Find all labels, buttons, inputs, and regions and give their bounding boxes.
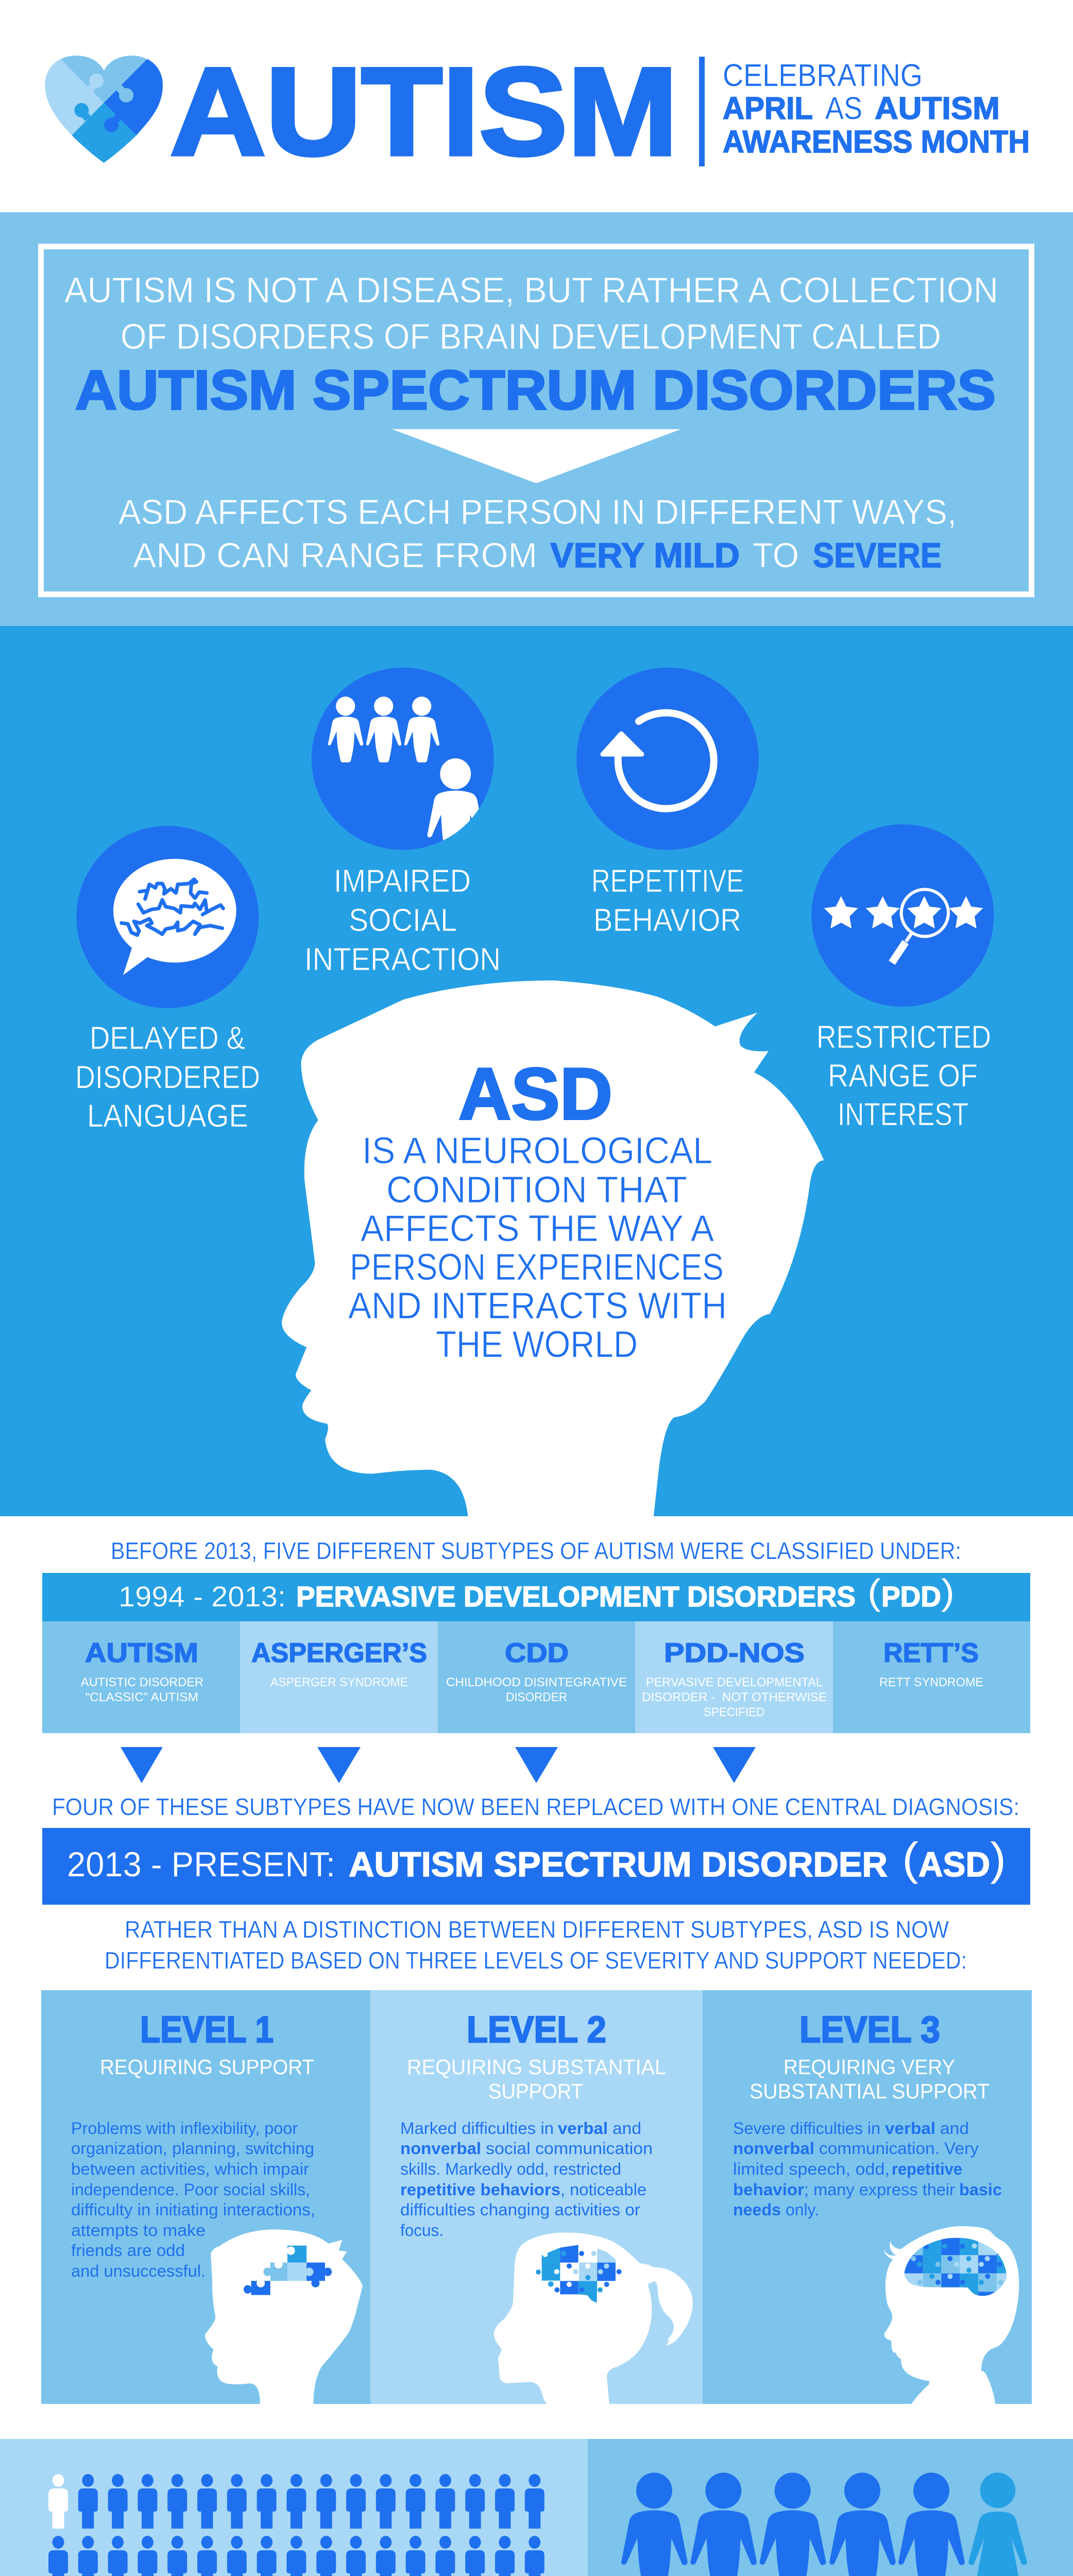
text: neurological condition: AFFECTS THE WAY A <box>361 1208 714 1249</box>
cell: PDD-NOS: DISORDER - NOT OTHERWISE <box>642 1690 827 1704</box>
cell: asperger's: ASPERGER SYNDROME <box>270 1675 408 1689</box>
text: level 1 description: difficulty in initiating interactions, <box>71 2200 315 2219</box>
heading: level 1: LEVEL 1 <box>140 2009 274 2050</box>
subheading: requiring substantial support: SUPPORT <box>488 2079 583 2103</box>
text: rather than a distinction: RATHER THAN A DISTINCTION BETWEEN DIFFERENT SUBTYPES, ASD IS NOW <box>125 1916 949 1943</box>
banner: ASD: 2013 - PRESENT: <box>67 1845 335 1884</box>
cell: rett's: RETT SYNDROME <box>879 1675 983 1689</box>
text: rather than a distinction: DIFFERENTIATED BASED ON THREE LEVELS OF SEVERITY AND SUPPORT NEEDED: <box>105 1947 967 1974</box>
head silhouette with full puzzle brain <box>884 2226 1019 2404</box>
text: level 1 description: and unsuccessful. <box>71 2262 206 2280</box>
white frame <box>41 246 1031 595</box>
banner: ASD <box>42 1828 1030 1905</box>
cell: autism: “CLASSIC” AUTISM <box>86 1690 198 1704</box>
cell: autism: AUTISM <box>85 1638 198 1668</box>
label: delayed and disordered language <box>75 1021 260 1134</box>
subtitle: celebrating april <box>723 58 1030 159</box>
cell: PDD-NOS: PDD-NOS <box>664 1638 805 1668</box>
text: level 3 description: repetitive <box>892 2160 962 2178</box>
banner: ASD: ASD <box>918 1845 990 1884</box>
text: level 2 description: social communication <box>486 2139 653 2158</box>
text: neurological condition: CONDITION THAT <box>386 1170 687 1211</box>
head silhouette <box>282 980 824 1517</box>
banner: PDD: PERVASIVE DEVELOPMENT DISORDERS <box>296 1580 856 1613</box>
label: repetitive behavior: REPETITIVE <box>591 863 744 899</box>
cell: PDD-NOS: SPECIFIED <box>704 1705 764 1719</box>
text: level 3 description: and <box>940 2119 969 2138</box>
heading: level 2: LEVEL 2 <box>467 2009 606 2050</box>
text: level 3 description: communication. Very <box>819 2139 979 2158</box>
text: level 3 description <box>733 2119 1002 2219</box>
label: delayed and disordered language: LANGUAGE <box>87 1098 248 1134</box>
text: level 3 description: limited speech, odd, <box>733 2160 890 2178</box>
label: delayed and disordered language: DELAYED & <box>90 1021 245 1056</box>
text: neurological condition: AND INTERACTS WITH <box>348 1285 727 1327</box>
heading: level 3: LEVEL 3 <box>799 2009 940 2050</box>
text: level 3 description: needs <box>733 2200 781 2219</box>
banner: PDD: 1994 - 2013: <box>118 1580 286 1613</box>
cell: rett's <box>833 1621 1030 1733</box>
text: asd affects each person: SEVERE <box>813 536 942 575</box>
text: level 3 description: basic <box>959 2180 1002 2199</box>
text: before 2013: BEFORE 2013, FIVE DIFFERENT SUBTYPES OF AUTISM WERE CLASSIFIED UNDER: <box>111 1537 961 1564</box>
label: impaired social interaction: IMPAIRED <box>334 863 471 899</box>
text: level 2 description: Marked difficulties in <box>400 2119 554 2138</box>
cell: CDD: CHILDHOOD DISINTEGRATIVE <box>446 1675 627 1689</box>
text: autism is not a disease: OF DISORDERS OF BRAIN DEVELOPMENT CALLED <box>121 316 941 357</box>
label: restricted range of interest: RESTRICTED <box>816 1020 991 1055</box>
text: level 3 description: only. <box>786 2200 819 2219</box>
banner: PDD: ) <box>941 1572 955 1612</box>
title: AUTISM: AUTISM <box>170 42 678 181</box>
text: four of these subtypes: FOUR OF THESE SUBTYPES HAVE NOW BEEN REPLACED WITH ONE CENTRAL DIAGNOSIS: <box>52 1793 1019 1820</box>
text: level 1 description: attempts to make <box>71 2221 206 2240</box>
cell: rett's: RETT’S <box>883 1638 979 1668</box>
text: level 1 description: organization, planning, switching <box>71 2139 314 2158</box>
text: asd affects each person: VERY MILD <box>550 536 740 575</box>
text: level 1 description <box>71 2119 315 2280</box>
banner: PDD: ( <box>867 1572 881 1612</box>
text: level 2 description: verbal <box>558 2119 608 2138</box>
arrow: down triangle <box>392 429 681 483</box>
subheading: requiring very substantial support: REQUIRING VERY <box>784 2055 955 2079</box>
text: neurological condition: THE WORLD <box>436 1324 638 1365</box>
panel: boys and girls statistic <box>588 2439 1073 2576</box>
subtitle: celebrating april: CELEBRATING <box>723 58 923 93</box>
panel: level 3 <box>703 1990 1032 2404</box>
text: level 2 description: difficulties changing activities or <box>400 2200 640 2219</box>
cell: autism <box>42 1621 240 1733</box>
text: level 1 description: Problems with inflexibility, poor <box>71 2119 298 2138</box>
text: autism is not a disease <box>64 270 998 357</box>
panel: definition <box>0 212 1073 626</box>
text: neurological condition: PERSON EXPERIENCES <box>350 1247 724 1288</box>
panel: level 2 <box>370 1990 703 2404</box>
banner: ASD: ( <box>902 1833 918 1884</box>
subheading: requiring very substantial support <box>750 2055 990 2103</box>
text: level 2 description: skills. Markedly odd, restricted <box>400 2160 621 2178</box>
text: level 3 description: Severe difficulties in <box>733 2119 880 2138</box>
cell: asperger's: ASPERGER’S <box>251 1638 427 1668</box>
head silhouette with few puzzle pieces <box>205 2229 363 2404</box>
subtitle: celebrating april: AWARENESS MONTH <box>723 124 1030 159</box>
banner: ASD: ) <box>990 1833 1006 1884</box>
cell: CDD <box>438 1621 635 1733</box>
label: impaired social interaction: INTERACTION <box>304 942 501 977</box>
text: asd affects each person: TO <box>753 536 799 575</box>
banner: PDD: PDD <box>881 1580 941 1613</box>
cell: PDD-NOS <box>635 1621 833 1733</box>
label: repetitive behavior <box>591 863 744 938</box>
text: level 2 description: , noticeable <box>560 2180 646 2199</box>
pictogram: five boys and one girl <box>621 2472 1027 2576</box>
heading: autism spectrum disorders: AUTISM SPECTRUM DISORDERS <box>75 359 996 421</box>
cell: CDD: DISORDER <box>506 1690 567 1704</box>
cell: CDD: CDD <box>505 1638 569 1668</box>
heading: ASD: ASD <box>458 1053 612 1135</box>
text: level 2 description: focus. <box>400 2221 444 2240</box>
icon: stars and magnifier <box>811 824 994 1007</box>
header <box>45 56 1028 166</box>
text: level 3 description: verbal <box>885 2119 935 2138</box>
icon: repeat arrow <box>576 668 759 850</box>
text: level 3 description: nonverbal <box>733 2139 814 2158</box>
text: level 2 description: nonverbal <box>400 2139 481 2158</box>
text: asd affects each person: AND CAN RANGE FROM <box>133 536 537 575</box>
subheading: requiring very substantial support: SUBSTANTIAL SUPPORT <box>750 2079 990 2103</box>
subheading: requiring substantial support: REQUIRING SUBSTANTIAL <box>407 2055 666 2079</box>
text: asd affects each person: ASD AFFECTS EACH PERSON IN DIFFERENT WAYS, <box>118 493 957 532</box>
pictogram: 68 people <box>48 2474 544 2576</box>
label: repetitive behavior: BEHAVIOR <box>593 903 741 938</box>
subtitle: celebrating april: AUTISM <box>875 91 1000 126</box>
subtitle: celebrating april: AS <box>825 91 862 126</box>
text: autism is not a disease: AUTISM IS NOT A DISEASE, BUT RATHER A COLLECTION <box>64 270 998 310</box>
text: level 3 description: ; many express their <box>804 2180 955 2199</box>
text: level 1 description: independence. Poor social skills, <box>71 2180 310 2199</box>
icon: people group <box>312 668 494 865</box>
panel: symptoms and head <box>0 626 1073 1517</box>
text: rather than a distinction <box>105 1916 967 1974</box>
banner: PDD <box>42 1572 1030 1621</box>
label: delayed and disordered language: DISORDERED <box>75 1060 260 1095</box>
text: level 3 description: behavior <box>733 2180 804 2199</box>
label: restricted range of interest: INTEREST <box>838 1097 968 1132</box>
banner: ASD: AUTISM SPECTRUM DISORDER <box>349 1845 888 1884</box>
head silhouette with ponytail and puzzle pieces <box>494 2232 693 2404</box>
subheading: requiring substantial support <box>407 2055 666 2103</box>
subheading: requiring support: REQUIRING SUPPORT <box>100 2055 314 2079</box>
cell: PDD-NOS: PERVASIVE DEVELOPMENTAL <box>646 1675 823 1689</box>
text: neurological condition: IS A NEUROLOGICAL <box>362 1130 712 1172</box>
text: asd affects each person <box>118 493 957 575</box>
label: restricted range of interest: RANGE OF <box>828 1058 978 1094</box>
text: level 2 description <box>400 2119 653 2240</box>
text: neurological condition <box>348 1130 727 1365</box>
panel: level 1 <box>41 1990 370 2404</box>
text: level 2 description: and <box>612 2119 641 2138</box>
label: impaired social interaction <box>304 863 501 977</box>
cell: autism: AUTISTIC DISORDER <box>81 1675 203 1689</box>
text: level 2 description: repetitive behaviors <box>400 2180 560 2199</box>
subtitle: celebrating april: APRIL <box>723 91 813 126</box>
panel: 1 in 68 statistic <box>0 2439 588 2576</box>
arrows: four subtypes down <box>121 1747 756 1783</box>
icon: puzzle heart logo <box>45 56 163 163</box>
text: level 1 description: between activities, which impair <box>71 2160 309 2178</box>
label: impaired social interaction: SOCIAL <box>349 903 457 938</box>
cell: asperger's <box>240 1621 438 1733</box>
text: level 1 description: friends are odd <box>71 2241 185 2260</box>
label: restricted range of interest <box>816 1020 991 1132</box>
panel: history of classification <box>42 1537 1030 1974</box>
header divider <box>699 57 705 166</box>
icon: speech bubble <box>76 826 259 1008</box>
